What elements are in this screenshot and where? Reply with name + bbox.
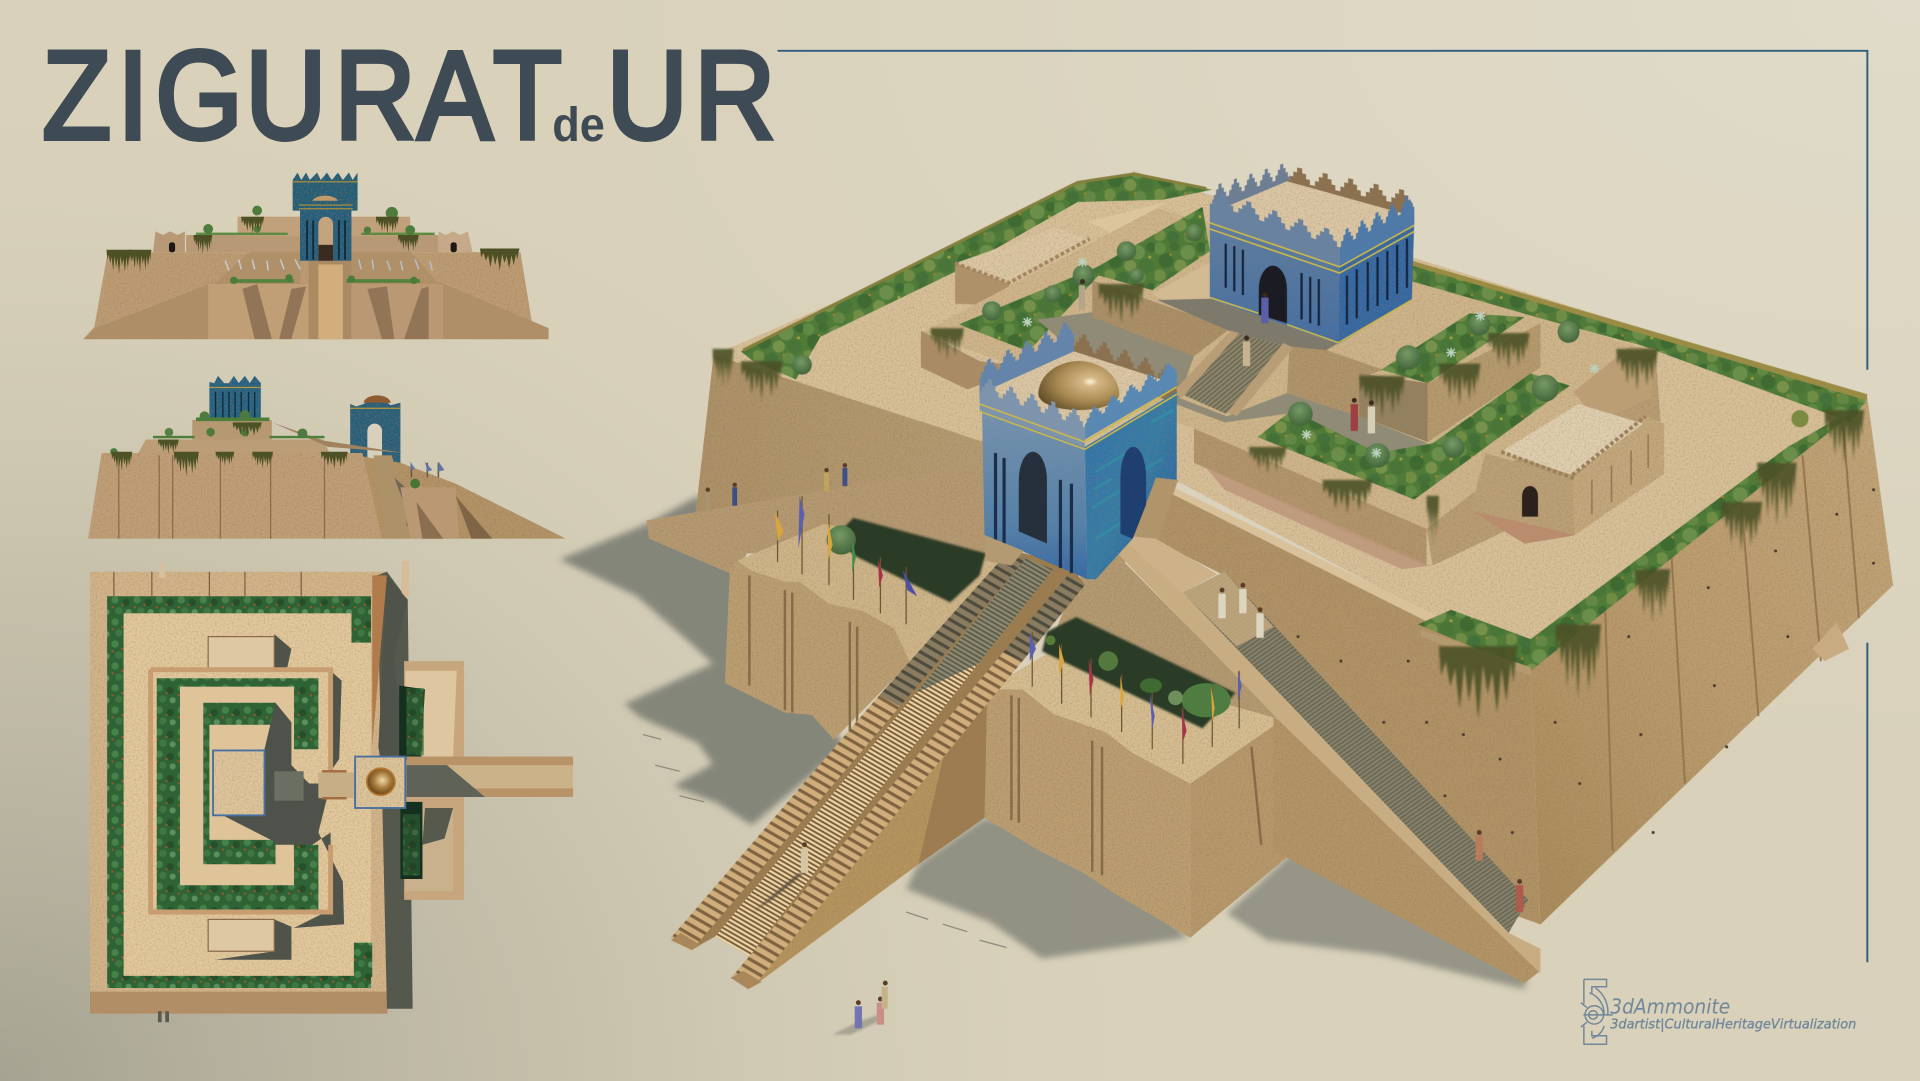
plan: shadows xyxy=(208,575,408,960)
side elevation: wall seams xyxy=(119,455,324,539)
side elevation: main wall xyxy=(88,453,382,539)
right exterior wall xyxy=(1531,398,1893,924)
title: ZIGURATUR xyxy=(42,26,775,166)
bushes xyxy=(792,224,1809,468)
terrace garden xyxy=(1042,617,1236,728)
garden front of middle tier xyxy=(1258,373,1570,499)
stair foot below tower xyxy=(984,535,1024,566)
side elevation xyxy=(88,376,566,539)
terrace front rim xyxy=(1156,479,1531,673)
terrace garden plants xyxy=(1046,635,1231,717)
upper stair xyxy=(1173,331,1293,416)
side elevation: upper tiers xyxy=(137,420,404,455)
left terrace shrub xyxy=(827,525,856,555)
plan: upper tower roof xyxy=(213,750,264,815)
plan: sand terrace xyxy=(124,613,371,976)
outer garden back right rim xyxy=(1408,260,1867,400)
ground shadows xyxy=(560,496,1531,989)
plan: central causeway xyxy=(274,770,355,801)
front elevation: lower wall xyxy=(83,252,549,339)
right stair: landing xyxy=(1118,535,1217,593)
terrace diagonal shadow xyxy=(1206,468,1430,569)
outer garden back right xyxy=(1408,262,1867,422)
left terrace wall xyxy=(725,561,911,739)
flags xyxy=(775,496,1242,764)
left terrace grooves xyxy=(749,575,857,732)
left flag terrace xyxy=(725,518,1019,739)
main stair xyxy=(671,550,1085,989)
main stair: person shadow xyxy=(753,869,808,912)
front blue tower xyxy=(980,318,1177,579)
middle tier front wall xyxy=(1194,428,1427,566)
people xyxy=(705,279,1523,1034)
main stair: backing xyxy=(671,550,1085,986)
main stair: steps shaded xyxy=(916,558,1053,693)
logo: ammonite mark xyxy=(1581,979,1613,1044)
plan: second ring walls xyxy=(151,670,331,912)
upper garden wall front xyxy=(1359,373,1428,442)
main stair: end caps xyxy=(671,933,762,989)
right stair: steps xyxy=(1183,572,1528,933)
back tower shadow xyxy=(1157,299,1338,351)
middle tier terrace xyxy=(921,208,1656,529)
back tower: roof xyxy=(1217,181,1406,251)
plan: second garden ring xyxy=(157,678,318,910)
title: de xyxy=(552,99,605,152)
people: left ramp xyxy=(705,463,847,511)
upper platform front wall xyxy=(1287,346,1384,416)
right stair: balustrade xyxy=(1101,535,1540,973)
back tower: front crowns xyxy=(1210,189,1414,267)
lower court around stair xyxy=(1037,312,1428,455)
front elevation: side ramps xyxy=(83,249,549,339)
upper garden xyxy=(1381,313,1524,383)
terrace right wall xyxy=(1190,720,1292,938)
back left wall xyxy=(696,353,994,514)
back tower: right wall xyxy=(1338,220,1414,344)
side elevation: stair and annex xyxy=(373,455,492,539)
plan: small roofs xyxy=(208,637,274,951)
low ramp wall xyxy=(647,463,1022,575)
back tower: left wall xyxy=(1210,218,1340,344)
middle tier left wall xyxy=(921,331,1029,389)
front elevation: central stair xyxy=(309,261,351,339)
ground shadow tips xyxy=(643,735,1007,948)
terrace top xyxy=(987,654,1282,784)
side elevation: ramp xyxy=(355,455,566,539)
plan: dome xyxy=(367,768,395,795)
plan: outer garden ring xyxy=(107,596,371,988)
front tower: arches xyxy=(1019,447,1146,544)
front tower: right wall xyxy=(1085,392,1177,579)
side elevation: back tower xyxy=(209,376,261,424)
people: main stair walker xyxy=(801,842,808,873)
terrace side face behind garden xyxy=(1047,539,1283,722)
front left exterior wall xyxy=(1151,479,1540,924)
garden rear-right wall xyxy=(1573,346,1656,422)
front right flag terrace xyxy=(984,471,1292,938)
front edge rim xyxy=(1420,629,1531,676)
outer garden back left rim xyxy=(743,174,1206,350)
front tower: left wall xyxy=(982,410,1087,579)
terrace wall grooves xyxy=(1011,695,1261,875)
upper platform wall xyxy=(1092,280,1231,356)
upper platform top xyxy=(1326,301,1462,370)
back tower: rear crowns xyxy=(1212,162,1414,226)
frame lines xyxy=(778,51,1867,962)
front tower: slits xyxy=(996,453,1071,573)
main stair: side wall xyxy=(754,585,1085,986)
plan: third garden ring xyxy=(203,703,276,864)
back tower: gold bands xyxy=(1210,223,1414,343)
front tower: teal glazing xyxy=(1092,410,1173,539)
front elevation xyxy=(83,173,549,339)
middle tier right wall xyxy=(1427,351,1663,566)
vines xyxy=(713,284,1864,720)
front elevation: upper tiers xyxy=(153,217,473,252)
main stair: right balustrade shaded xyxy=(1003,575,1085,661)
right side stair xyxy=(1101,535,1540,983)
logo: wordmark: 3dAmmonite xyxy=(1610,995,1730,1019)
inner garden back left xyxy=(959,207,1210,351)
outer garden front right xyxy=(1418,402,1867,671)
front tower: gold bands xyxy=(980,387,1177,449)
right stair: outer face xyxy=(1273,717,1540,983)
plan: annex xyxy=(399,661,464,900)
wall holes xyxy=(1298,637,1512,832)
back tower sand strip xyxy=(1152,262,1210,306)
front elevation: gardens and vines xyxy=(107,206,520,284)
plan: main stair xyxy=(407,757,573,797)
front tower: front crowns xyxy=(980,358,1177,447)
front elevation: blue tower xyxy=(293,173,358,261)
upper terrace xyxy=(714,171,1867,667)
small right building xyxy=(1471,404,1664,544)
main stair: left balustrade lit xyxy=(671,695,900,949)
wedge wall right of front tower xyxy=(1078,471,1178,588)
plan: fourth tier shadow xyxy=(220,703,321,845)
back blue tower xyxy=(1210,162,1414,344)
side elevation: front tower xyxy=(350,395,400,465)
plan: outer platform xyxy=(90,561,413,1022)
plan view xyxy=(90,561,573,1022)
back tower: slits xyxy=(1226,239,1407,326)
main stair: right balustrade lit xyxy=(731,653,1022,986)
back left building xyxy=(955,202,1166,306)
main stair: steps lit xyxy=(715,664,978,956)
upper garden wall right xyxy=(1428,323,1540,442)
left terrace garden xyxy=(833,518,986,602)
outer garden back left xyxy=(741,173,1212,380)
plan: inner sand xyxy=(180,687,294,885)
people: upper terraces xyxy=(1079,279,1375,433)
logo: 3dAmmonite xyxy=(1581,979,1856,1044)
front tower: dome xyxy=(1038,361,1119,410)
people: right stair xyxy=(1218,583,1523,912)
left terrace top xyxy=(737,524,1019,667)
right stair: lit top xyxy=(1183,572,1273,646)
main stair: side wall shade xyxy=(918,704,987,864)
main isometric ziggurat xyxy=(560,162,1893,1034)
front tower: rear crowns xyxy=(980,318,1177,404)
plan: corner garden bottom xyxy=(354,943,372,977)
front tower: roof xyxy=(989,351,1169,428)
plan: front tower roof xyxy=(355,757,405,808)
logo: tagline: 3dartist|CulturalHeritageVirtualization xyxy=(1610,1017,1856,1032)
people: ground group xyxy=(833,981,888,1034)
side elevation: greenery xyxy=(110,410,348,476)
front elevation: flags xyxy=(225,260,432,271)
back tower: arch xyxy=(1259,266,1287,323)
main stair: left balustrade shaded xyxy=(879,550,1026,706)
terrace left wall xyxy=(984,689,1190,938)
